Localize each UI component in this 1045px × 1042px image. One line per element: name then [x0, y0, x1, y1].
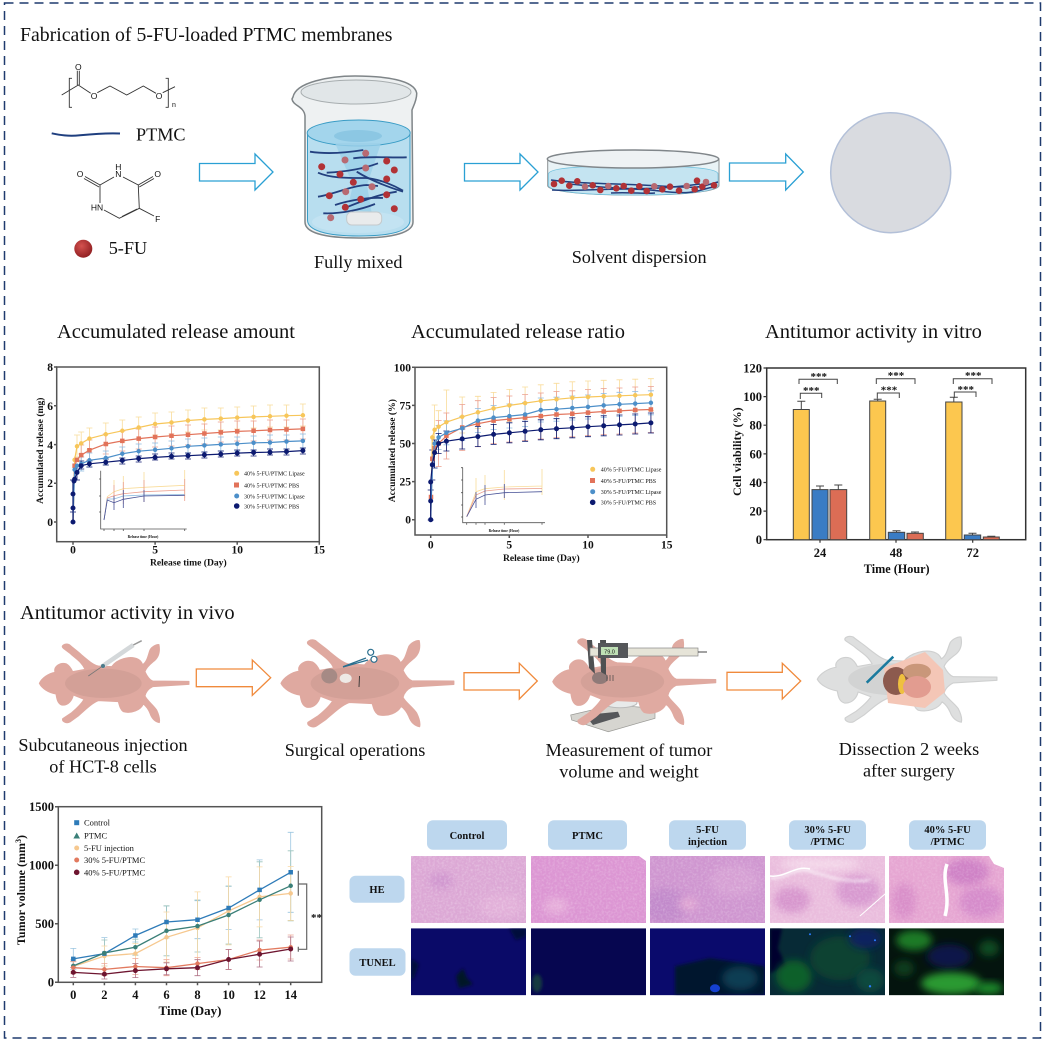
heading: accumulated release amount: Accumulated release amount [57, 321, 295, 343]
label: dissection: Dissection 2 weeks [839, 739, 979, 759]
label: surgical operations: Surgical operations [285, 740, 425, 760]
chart: tumor volume: 2 [101, 988, 108, 1002]
label: 5-FU: 5-FU [109, 238, 147, 258]
label: measurement: Measurement of tumor [546, 740, 712, 760]
label: subcutaneous injection: of HCT-8 cells [49, 757, 157, 777]
chart: cell viability bars: 20 [750, 504, 762, 518]
arrow: blue 3 [730, 154, 803, 190]
series: 40% lipase [431, 395, 651, 520]
heading: accumulated release ratio: Accumulated release ratio [411, 321, 625, 343]
group label: 40% 5-FU/PTMC [909, 820, 986, 850]
icon: 5-FU chemical structure: H [115, 162, 121, 172]
chart: accumulated release ratio: 0 [428, 540, 434, 552]
heading: fabrication: Fabrication of 5-FU-loaded PTMC membranes [20, 24, 392, 46]
chart: tumor volume: Time (Day) [159, 1003, 221, 1018]
chart: accumulated release ratio [387, 362, 673, 564]
chart: accumulated release amount: 5 [152, 544, 158, 556]
legend: 40% 5-FU/PTMC PBS [244, 483, 299, 489]
legend [234, 471, 305, 510]
legend: 40% 5-FU/PTMC Lipase [601, 468, 662, 474]
series: PTMC [73, 886, 291, 966]
significance brackets: *** [957, 384, 974, 396]
chart: accumulated release ratio: 5 [506, 540, 512, 552]
group label: 30% 5-FU/PTMC: /PTMC [810, 837, 844, 848]
icon: 5-FU chemical structure: F [155, 214, 160, 224]
series: 40% PBS [431, 410, 651, 520]
arrow: blue 1 [200, 154, 273, 190]
legend: 30% 5-FU/PTMC PBS [601, 501, 656, 507]
label: fully mixed: Fully mixed [314, 252, 402, 272]
chart: cell viability bars: 120 [743, 362, 762, 376]
chart: accumulated release amount: 8 [47, 362, 53, 374]
significance brackets: *** [803, 385, 820, 397]
legend: Control [84, 818, 111, 828]
chart: tumor volume: 500 [35, 917, 54, 931]
chart: cell viability bars [730, 362, 1026, 576]
significance brackets: *** [810, 371, 827, 383]
bars: 48 hour [870, 399, 923, 540]
legend: 5-FU injection [84, 843, 135, 853]
group label: 5-FU injection: 5-FU [696, 825, 719, 836]
inset chart [461, 468, 545, 533]
icon: 5-FU chemical structure: N [115, 169, 121, 179]
arrow: blue 2 [464, 154, 538, 190]
label: measurement: volume and weight [559, 762, 699, 782]
icon: mouse under surgery [281, 640, 454, 727]
icon: 5-FU chemical structure: O [77, 169, 84, 179]
inset chart: Release time (Hour) [489, 529, 520, 533]
row label: TUNEL [350, 948, 406, 976]
label: solvent dispersion: Solvent dispersion [572, 247, 707, 267]
legend: 30% 5-FU/PTMC Lipase [601, 490, 662, 496]
chart: cell viability bars: 40 [750, 476, 762, 490]
chart: tumor volume: 10 [222, 988, 235, 1002]
micrograph: TUNEL PTMC [531, 928, 646, 996]
significance brackets: *** [965, 370, 982, 382]
micrograph: TUNEL 5-FU injection [650, 928, 765, 996]
chart: accumulated release ratio: 15 [661, 540, 673, 552]
icon: dissected mouse [817, 636, 997, 722]
significance brackets [799, 370, 992, 399]
arrow: orange 2 [464, 663, 537, 699]
chart: accumulated release ratio: 0 [405, 515, 411, 527]
chart: tumor volume: 6 [163, 988, 170, 1002]
icon: beaker with mixture [292, 76, 417, 238]
icon: PTMC chemical structure: O [91, 91, 98, 101]
chart: accumulated release ratio: 75 [400, 400, 411, 412]
legend: 30% 5-FU/PTMC [84, 855, 145, 865]
arrow: orange 3 [727, 663, 801, 699]
significance brackets: *** [888, 370, 905, 382]
group label: 30% 5-FU/PTMC [789, 820, 866, 850]
series: 40% PBS [73, 429, 303, 522]
significance brackets: *** [881, 384, 898, 396]
icon: PTMC chemical structure: O [156, 91, 163, 101]
legend: 40% 5-FU/PTMC Lipase [244, 472, 305, 478]
chart: accumulated release ratio: 10 [582, 540, 594, 552]
chart: accumulated release amount: 10 [231, 544, 243, 556]
chart: accumulated release amount [35, 362, 325, 568]
chart: accumulated release amount: Release time (Day) [150, 558, 227, 568]
series: 30% PBS [431, 423, 651, 520]
legend: 30% 5-FU/PTMC Lipase [244, 494, 305, 500]
chart: tumor volume: 1500 [29, 800, 54, 814]
bars: 72 hour [946, 397, 999, 540]
icon: finished membrane [831, 113, 951, 233]
legend [73, 818, 145, 877]
icon: PTMC strand [52, 133, 120, 136]
group label: 30% 5-FU/PTMC: 30% 5-FU [804, 825, 851, 836]
chart: accumulated release ratio: 25 [400, 477, 411, 489]
chart: accumulated release amount: 0 [70, 544, 76, 556]
chart: cell viability bars: 48 [890, 546, 902, 560]
series: 30% 5-FU/PTMC [73, 947, 291, 969]
chart: tumor volume: 3 [14, 839, 23, 843]
icon: petri dish [547, 150, 719, 195]
legend [590, 467, 662, 507]
group label: 5-FU injection: injection [688, 837, 727, 848]
bars: 24 hour [793, 401, 847, 540]
group label: PTMC [548, 820, 627, 850]
chart: cell viability bars: Time (Hour) [864, 562, 930, 576]
group label: 40% 5-FU/PTMC: 40% 5-FU [924, 825, 971, 836]
icon: PTMC chemical structure: O [75, 62, 82, 72]
micrograph: HE control [411, 856, 526, 923]
chart: tumor volume: 1000 [29, 858, 54, 872]
chart: accumulated release amount: Accumulated release (mg) [35, 398, 46, 504]
icon: 5-FU chemical structure: HN [91, 202, 103, 212]
label: PTMC: PTMC [136, 125, 186, 145]
inset chart [99, 470, 187, 539]
label: dissection: after surgery [863, 761, 956, 781]
legend: 40% 5-FU/PTMC PBS [601, 479, 656, 485]
series: 5-FU injection [73, 893, 291, 966]
group label: PTMC: PTMC [572, 831, 603, 842]
series: 40% 5-FU/PTMC [73, 949, 291, 974]
chart: accumulated release amount: 15 [314, 544, 325, 556]
icon: PTMC chemical structure: n [172, 102, 176, 109]
group label: Control: Control [450, 831, 484, 842]
chart: cell viability bars: 100 [743, 390, 762, 404]
chart: accumulated release amount: 6 [47, 401, 53, 413]
icon: mouse with syringe [39, 641, 189, 723]
chart: accumulated release amount: 0 [47, 517, 53, 529]
chart: cell viability bars: 80 [750, 419, 762, 433]
chart: tumor volume: 14 [284, 988, 298, 1002]
chart: accumulated release amount: 4 [47, 440, 53, 452]
icon: mouse on scale with caliper [553, 639, 716, 732]
chart: tumor volume: 8 [194, 988, 201, 1002]
chart: cell viability bars: Cell viability (%) [730, 407, 744, 496]
chart: cell viability bars: 60 [750, 447, 762, 461]
series: error bars [70, 832, 294, 979]
series: 30% lipase [73, 441, 303, 522]
chart: tumor volume: 0 [48, 976, 54, 990]
chart: tumor volume: 0 [70, 988, 76, 1002]
chart: cell viability bars: 72 [966, 546, 979, 560]
icon: PTMC chemical structure [62, 62, 176, 109]
chart: tumor volume: 12 [253, 988, 266, 1002]
micrograph: HE PTMC [531, 856, 646, 923]
heading: antitumor activity in vivo: Antitumor activity in vivo [20, 602, 235, 624]
chart: tumor volume: Tumor volume (mm [14, 843, 28, 945]
arrow: orange 1 [196, 660, 271, 695]
chart: accumulated release ratio: 50 [400, 438, 411, 450]
legend: 30% 5-FU/PTMC PBS [244, 504, 299, 510]
row label: TUNEL: TUNEL [359, 958, 396, 969]
icon: 5-FU chemical structure [77, 162, 161, 224]
legend: 40% 5-FU/PTMC [84, 867, 145, 877]
row label: HE [350, 876, 404, 903]
micrograph: HE 40% 5-FU/PTMC [889, 856, 1004, 923]
micrograph: TUNEL control [411, 928, 526, 996]
group label: Control [427, 820, 507, 850]
label: subcutaneous injection: Subcutaneous injection [18, 735, 188, 755]
series: 30% PBS [73, 451, 303, 522]
series: 30% lipase [431, 403, 651, 520]
group label: 40% 5-FU/PTMC: /PTMC [930, 837, 964, 848]
chart: accumulated release ratio: 100 [394, 362, 411, 374]
chart: cell viability bars: 24 [814, 546, 827, 560]
micrograph: TUNEL 30% 5-FU/PTMC [770, 928, 885, 996]
icon: mouse on scale with caliper: 79.0 [604, 650, 615, 656]
chart: cell viability bars: 0 [756, 533, 762, 547]
legend: PTMC [84, 830, 107, 840]
inset chart: Release time (Hour) [128, 535, 159, 539]
micrograph: TUNEL 40% 5-FU/PTMC [889, 928, 1004, 996]
series: 40% lipase [73, 415, 303, 522]
chart: accumulated release ratio: Release time (Day) [503, 553, 580, 564]
group label: 5-FU injection [669, 820, 746, 850]
series: error bars [428, 379, 654, 520]
chart: tumor volume [14, 800, 322, 1018]
icon: 5-FU chemical structure: O [154, 169, 161, 179]
chart: accumulated release amount: 2 [47, 478, 53, 490]
row label: HE: HE [369, 885, 385, 896]
significance bracket: ** [311, 912, 322, 924]
chart: accumulated release ratio: Accumulated release (%) [387, 399, 398, 502]
chart: tumor volume: 4 [132, 988, 139, 1002]
micrograph: HE 5-FU injection [650, 856, 765, 923]
significance bracket [298, 871, 322, 952]
micrograph: HE 30% 5-FU/PTMC [770, 856, 885, 923]
series: control [73, 872, 291, 959]
heading: antitumor activity in vitro: Antitumor activity in vitro [765, 321, 982, 343]
series: error bars [70, 404, 306, 512]
chart: tumor volume: ) [14, 835, 28, 839]
icon: 5-FU ball [74, 240, 92, 258]
